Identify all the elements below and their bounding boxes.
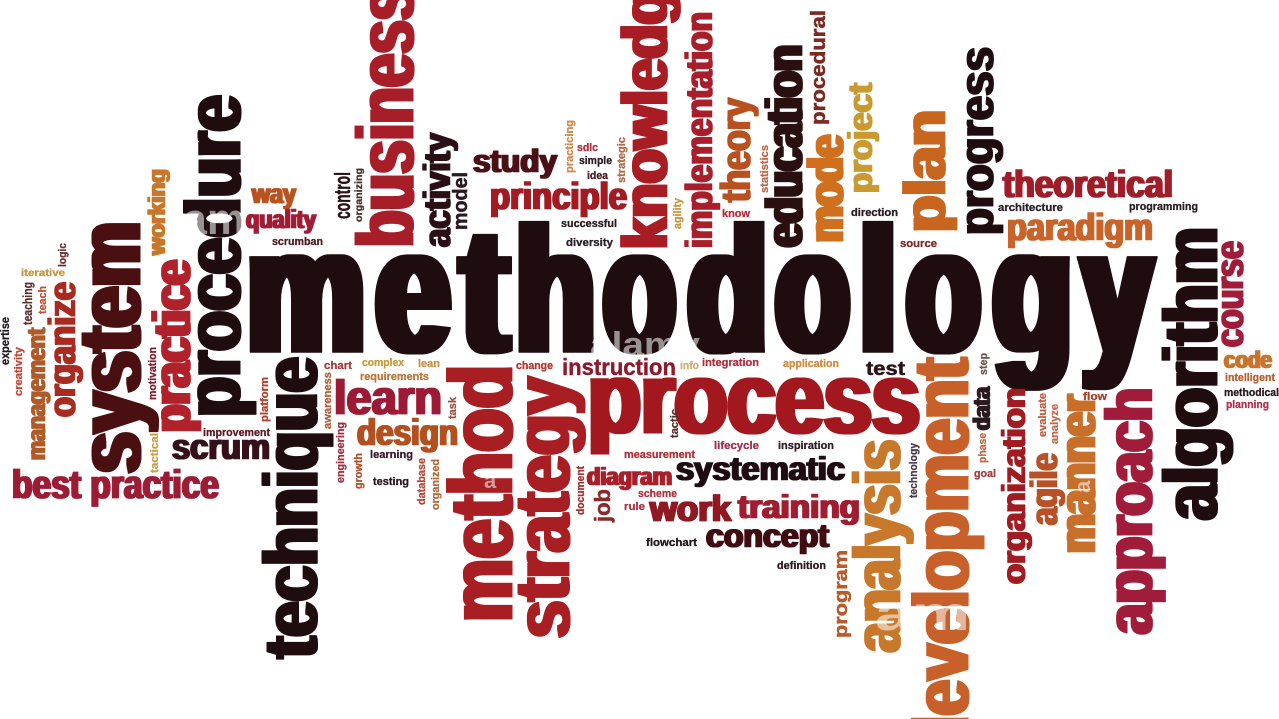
word: rule: rule (624, 501, 645, 513)
word: diversity: diversity (566, 237, 614, 249)
word: organizing: organizing (354, 168, 365, 222)
word: project: project (842, 83, 880, 193)
word: methodology: t (461, 190, 508, 391)
word: measurement: measurement (624, 449, 695, 461)
word: tactic: tactic (669, 409, 681, 438)
word: chart: chart (324, 360, 352, 372)
word: engineering: engineering (335, 422, 347, 483)
word: methodology: e (376, 190, 450, 391)
watermark: alamy marks: a (1070, 480, 1095, 493)
word: systematic: systematic (676, 450, 845, 487)
word: agility: agility (672, 197, 684, 229)
watermark: alamy marks: a (484, 468, 497, 493)
word: logic: logic (57, 243, 69, 267)
word: process: process (588, 341, 920, 455)
word: direction: direction (851, 207, 898, 219)
word: plan: plan (893, 110, 958, 232)
word: approach: approach (1092, 388, 1166, 634)
word: learn: learn (334, 372, 442, 425)
word: step: step (978, 353, 990, 375)
word: agile: agile (1024, 453, 1066, 525)
word: technology: technology (908, 442, 920, 498)
word: progress: progress (951, 47, 1004, 235)
watermark: alamy marks: alamy (590, 326, 700, 364)
word: instruction: instruction (562, 354, 676, 380)
word: methodology: o (907, 190, 980, 391)
word: methodology: d (688, 190, 767, 391)
word: methodology: m (247, 190, 365, 391)
word: code: code (1224, 347, 1272, 374)
word: design: design (357, 412, 458, 453)
word: learning: learning (370, 449, 413, 461)
word: quality: quality (246, 204, 316, 234)
word: architecture: architecture (998, 202, 1063, 214)
word: procedure: procedure (169, 95, 257, 417)
word: theory: theory (712, 97, 759, 202)
word: application: application (783, 358, 839, 370)
word: concept: concept (706, 517, 829, 554)
word: methodology: y (1082, 190, 1152, 391)
word: statistics: statistics (759, 145, 771, 193)
word: education: education (756, 45, 814, 247)
word: methodology: h (516, 190, 595, 391)
word: training: training (738, 488, 860, 525)
word: integration: integration (702, 357, 759, 369)
word: teaching: teaching (20, 282, 35, 325)
word: phase: phase (977, 433, 989, 463)
word: idea: idea (587, 170, 609, 182)
word: testing: testing (373, 476, 409, 488)
word: activity: activity (417, 133, 459, 247)
word: database: database (416, 458, 428, 505)
word: planning: planning (1226, 399, 1269, 411)
watermark: alamy marks: am (875, 588, 970, 641)
word: intelligent: intelligent (1225, 372, 1275, 384)
word: flow: flow (1083, 391, 1107, 403)
word: sdlc: sdlc (577, 142, 598, 154)
word: platform: platform (259, 377, 271, 422)
word: scheme: scheme (638, 488, 677, 500)
word: analyze: analyze (1049, 404, 1061, 444)
word: growth: growth (353, 453, 365, 489)
word: scrum: scrum (172, 426, 270, 467)
word: successful: successful (561, 218, 617, 230)
word: source: source (900, 238, 937, 250)
watermark: alamy marks (183, 195, 1095, 641)
word: test: test (866, 359, 906, 380)
word: scrumban: scrumban (272, 236, 323, 248)
word: paradigm: paradigm (1007, 207, 1153, 249)
word: tactical: tactical (149, 433, 161, 473)
word: methodology: g (993, 190, 1072, 391)
word: algorithm: algorithm (1149, 227, 1234, 520)
watermark: alamy marks: am (183, 195, 245, 244)
word: strategy: strategy (498, 377, 586, 638)
word: simple: simple (579, 155, 612, 167)
word: iterative: iterative (21, 268, 65, 279)
word: job: job (590, 489, 615, 523)
word: procedural: procedural (808, 10, 830, 125)
word: methodology: l (860, 190, 896, 391)
word: methodology: o (604, 190, 675, 391)
word: method: method (432, 365, 532, 622)
word: lean: lean (418, 358, 440, 370)
word: work: work (649, 488, 732, 529)
word: know: know (722, 208, 750, 220)
word: manner: manner (1049, 395, 1107, 553)
word: motivation: motivation (147, 347, 159, 400)
word: practice: practice (143, 260, 202, 432)
word: complex: complex (362, 357, 405, 369)
word: document: document (575, 466, 587, 515)
word: theoretical: theoretical (1003, 164, 1173, 206)
word: methodology: o (776, 190, 849, 391)
word: change: change (516, 360, 553, 372)
word: flowchart: flowchart (646, 537, 697, 549)
word: working: working (144, 169, 171, 256)
word: principle: principle (490, 176, 627, 218)
word: definition: definition (777, 560, 826, 572)
word: awareness: awareness (322, 372, 334, 429)
word: control: control (330, 172, 355, 219)
word: diagram: diagram (587, 463, 672, 491)
word: study: study (473, 143, 557, 179)
word: course: course (1208, 241, 1252, 347)
word: evaluate: evaluate (1037, 393, 1049, 437)
word: task: task (447, 396, 459, 419)
word: inspiration: inspiration (778, 440, 834, 452)
word: best practice: best practice (12, 463, 219, 507)
word: program: program (831, 550, 851, 638)
word: data: data (969, 386, 996, 430)
word: creativity: creativity (13, 346, 25, 396)
word: organized: organized (430, 459, 442, 510)
word: system: system (59, 222, 159, 473)
word: strategic: strategic (616, 137, 628, 183)
word: analysis: analysis (840, 440, 914, 652)
word: improvement: improvement (203, 427, 270, 439)
word: lifecycle: lifecycle (714, 440, 759, 452)
word: management: management (21, 328, 51, 460)
word: info: info (680, 360, 699, 372)
word: programming: programming (1129, 201, 1198, 213)
word: mode: mode (798, 135, 854, 242)
word: practicing: practicing (564, 120, 576, 173)
word: requirements: requirements (360, 371, 429, 383)
word: technique: technique (249, 357, 334, 658)
word: goal: goal (974, 468, 996, 480)
word: way: way (251, 178, 296, 209)
word: organize: organize (42, 282, 84, 417)
word: organization: organization (995, 388, 1032, 584)
word: model: model (450, 172, 472, 230)
word: teach: teach (37, 286, 49, 314)
